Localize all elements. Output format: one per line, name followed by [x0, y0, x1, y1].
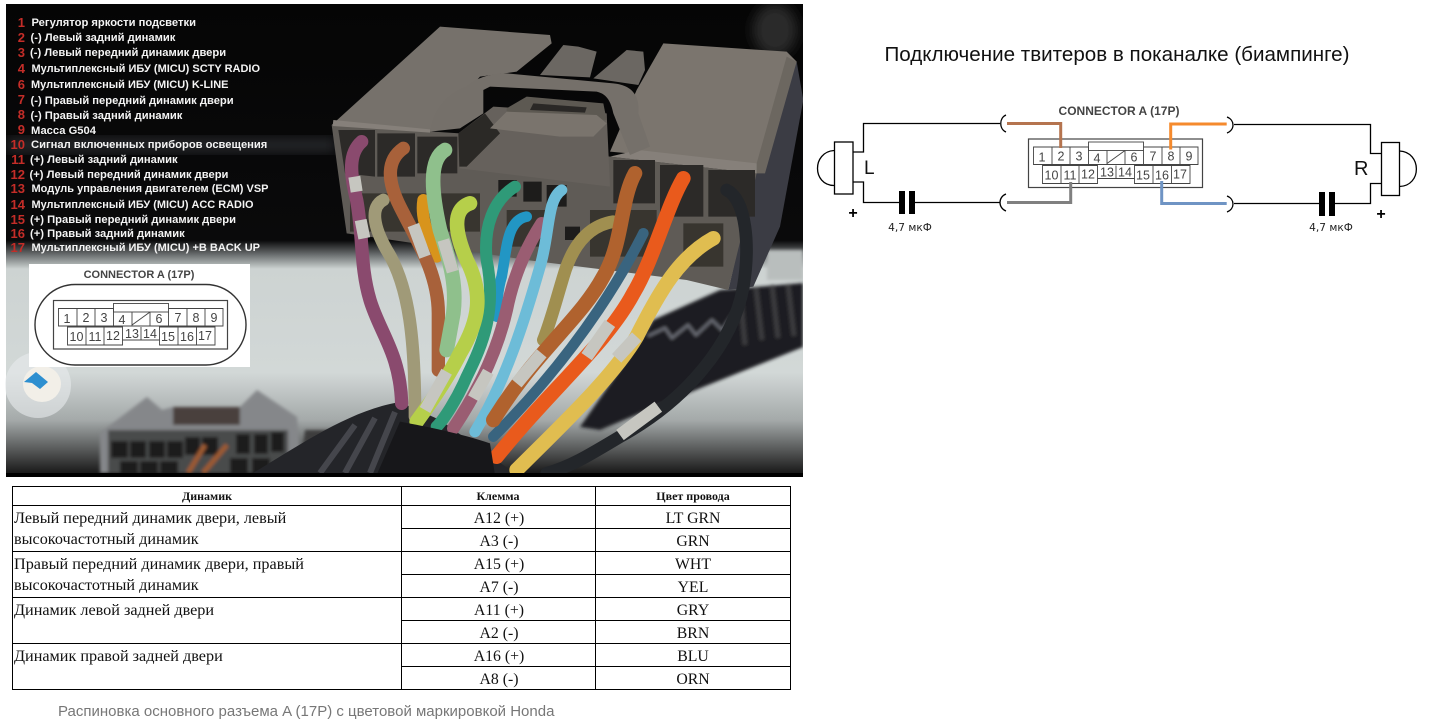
pinout list: 13 [11, 181, 25, 196]
inset: connector diagram: CONNECTOR A (17P) [84, 269, 195, 281]
connector pin block: 11 [1064, 168, 1077, 182]
pinout list: 10 [11, 137, 25, 152]
inset: connector diagram: 1 [64, 312, 71, 326]
pinout list: Сигнал включенных приборов освещения [31, 139, 267, 151]
table header [182, 489, 730, 503]
caption: Распиновка основного разъема A (17P) с цветовой маркировкой Honda [58, 703, 555, 720]
table rows: A3 (-) [479, 533, 519, 550]
connector pin block: 3 [1076, 150, 1083, 164]
table rows: ORN [676, 671, 710, 688]
inset: connector diagram: 10 [70, 330, 83, 344]
wire: brown to pin 2 [1007, 124, 1061, 148]
table rows: A11 (+) [474, 602, 524, 619]
table rows: A7 (-) [479, 579, 519, 596]
table rows: A2 (-) [479, 625, 519, 642]
right capacitor [1319, 192, 1335, 216]
inset: connector diagram: 16 [180, 330, 194, 344]
wire: blue to pin 16 [1162, 181, 1227, 204]
pinout list: (+) Левый задний динамик [30, 154, 178, 166]
connector pin block: 12 [1081, 168, 1095, 182]
table rows: BRN [677, 625, 710, 642]
pinout list: Мультиплексный ИБУ (MICU) ACC RADIO [32, 199, 254, 211]
table rows: A16 (+) [474, 648, 524, 665]
pinout list: 11 [11, 152, 25, 167]
pinout list: 17 [11, 240, 25, 255]
pinout list: 7 [18, 92, 25, 107]
inset: connector diagram: 15 [161, 330, 175, 344]
table rows: Динамик правой задней двери [14, 647, 223, 665]
pinout list: 2 [18, 30, 25, 45]
pinout list: (+) Правый передний динамик двери [30, 214, 236, 226]
table rows: YEL [678, 579, 708, 596]
connector housing [332, 27, 803, 290]
inset: connector diagram: 17 [198, 329, 212, 343]
table: speaker terminals and wire colours [12, 486, 790, 690]
left speaker and circuit [818, 115, 1006, 211]
pinout list: 4 [18, 61, 26, 76]
left capacitor [899, 191, 915, 214]
pinout list: Мультиплексный ИБУ (MICU) SCTY RADIO [32, 63, 260, 75]
diagram title: Подключение твитеров в поканалке (биампинге) [884, 43, 1350, 66]
table header: Клемма [476, 489, 520, 503]
pinout list: 3 [18, 45, 25, 60]
connector pin block [1028, 139, 1202, 188]
connector pin block: 6 [1131, 150, 1138, 164]
table rows: высокочастотный динамик [14, 576, 199, 594]
inset: connector diagram: 3 [101, 311, 108, 325]
pinout list: Масса G504 [31, 125, 97, 137]
pinout list: 9 [18, 122, 25, 137]
inset: connector diagram: 6 [156, 312, 163, 326]
connector pin block: 15 [1136, 168, 1150, 182]
pinout list: (-) Левый задний динамик [30, 32, 176, 44]
capacitor value left: 4,7 мкФ [888, 222, 932, 234]
plus right: + [1376, 206, 1386, 223]
pinout list: (+) Правый задний динамик [30, 228, 185, 240]
connector pin block: 14 [1118, 166, 1132, 180]
inset: connector diagram: 7 [175, 311, 182, 325]
inset: connector diagram: 4 [119, 313, 126, 327]
pinout list: (+) Левый передний динамик двери [30, 169, 229, 181]
wiring diagram [818, 104, 1416, 234]
pinout list: Регулятор яркости подсветки [32, 17, 196, 29]
pinout list: Модуль управления двигателем (ECM) VSP [32, 183, 269, 195]
pinout list [11, 15, 269, 255]
table rows: высокочастотный динамик [14, 530, 199, 548]
pinout list: Мультиплексный ИБУ (MICU) +B BACK UP [32, 242, 261, 254]
connector pin block: 2 [1058, 150, 1065, 164]
pinout list: 12 [11, 167, 25, 182]
table rows: A8 (-) [479, 671, 519, 688]
pinout list: (-) Правый задний динамик [30, 110, 183, 122]
pinout list: 16 [11, 226, 25, 241]
wires [352, 142, 746, 473]
pinout list: 1 [18, 15, 25, 30]
pinout list: 14 [11, 197, 26, 212]
table rows: BLU [677, 648, 709, 665]
connector pin block: 9 [1186, 150, 1193, 164]
connector pin block: 13 [1100, 166, 1114, 180]
plus left: + [848, 205, 858, 222]
table rows: LT GRN [666, 510, 721, 527]
inset: connector diagram: 13 [125, 327, 139, 341]
blurred background connector [100, 390, 345, 473]
table rows: A12 (+) [474, 510, 524, 527]
table rows: GRY [677, 602, 709, 619]
connector pin block: 8 [1168, 150, 1175, 164]
connector pin block: 17 [1173, 168, 1187, 182]
connector pin block: 1 [1039, 150, 1046, 164]
connector pin block: 16 [1155, 168, 1169, 182]
icon: blue logo badge [5, 352, 71, 418]
wire bundle wrap [377, 422, 495, 475]
inset: connector diagram [29, 264, 250, 367]
wire: orange to pin 8 [1171, 124, 1227, 150]
pinout list: Мультиплексный ИБУ (MICU) K-LINE [31, 79, 229, 91]
pinout list: 6 [18, 77, 25, 92]
connector pin block: 4 [1094, 152, 1101, 166]
table header: Цвет провода [656, 489, 730, 503]
connector heading: CONNECTOR A (17P) [1059, 104, 1179, 118]
inset: connector diagram: 14 [143, 327, 157, 341]
table rows: Правый передний динамик двери, правый [14, 555, 304, 573]
photo: wiring harness connector [6, 4, 803, 477]
corrugated loom right [580, 283, 803, 430]
table rows: A15 (+) [474, 556, 524, 573]
right speaker and circuit [1227, 117, 1416, 212]
inset: connector diagram: 9 [211, 311, 218, 325]
label R: R [1354, 158, 1368, 180]
connector pin block: 10 [1045, 168, 1058, 182]
pinout list: 8 [18, 107, 25, 122]
table rows: Левый передний динамик двери, левый [14, 509, 287, 527]
label L: L [864, 158, 875, 179]
pinout list: 15 [11, 212, 25, 227]
inset: connector diagram: 11 [89, 330, 102, 344]
wire: gray to pin 11 [1007, 182, 1071, 202]
table rows: Динамик левой задней двери [14, 601, 214, 619]
corrugated loom left [254, 403, 510, 473]
connector pin block: 7 [1150, 150, 1157, 164]
inset: connector diagram: 8 [193, 311, 200, 325]
table header: Динамик [182, 489, 232, 503]
table rows [14, 509, 721, 688]
pinout list: (-) Правый передний динамик двери [30, 95, 234, 107]
table rows: WHT [675, 556, 711, 573]
inset: connector diagram: 12 [106, 329, 120, 343]
table rows: GRN [676, 533, 710, 550]
pinout list: (-) Левый передний динамик двери [30, 47, 226, 59]
inset: connector diagram: 2 [83, 311, 90, 325]
capacitor value right: 4,7 мкФ [1309, 222, 1353, 234]
